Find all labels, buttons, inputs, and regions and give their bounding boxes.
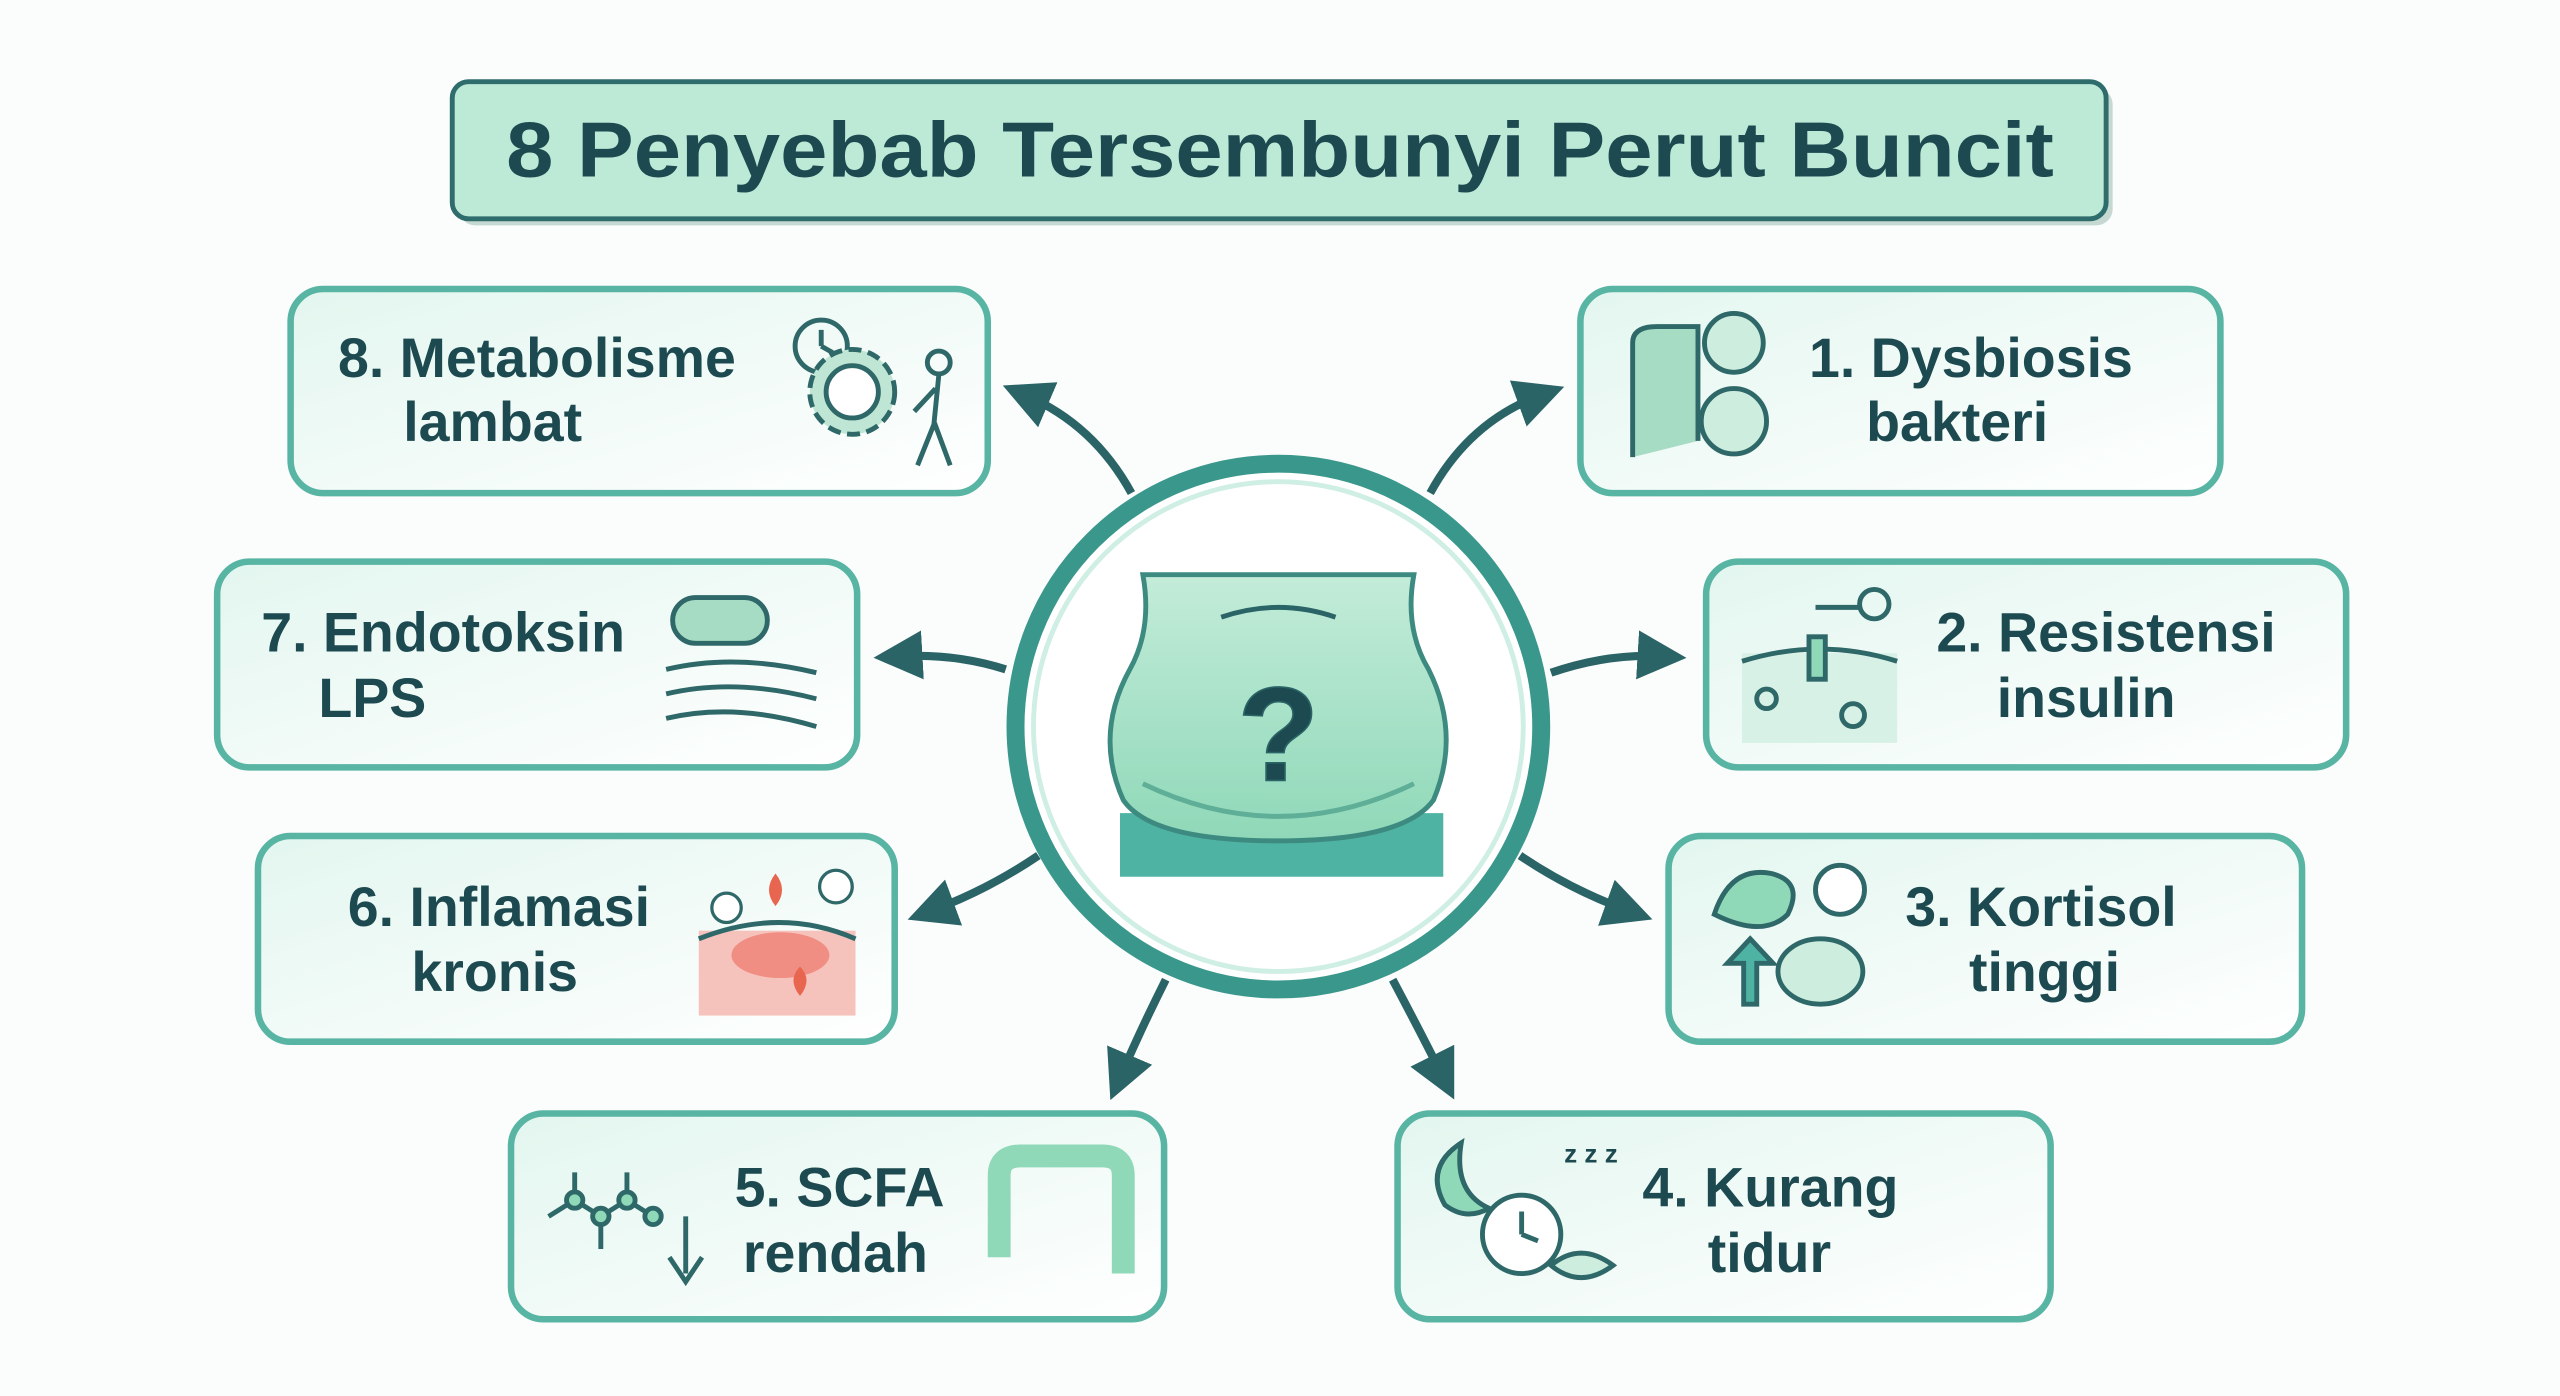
- icon: moon clock eye: [1437, 1139, 1618, 1278]
- panel: 8 metabolisme: 8. Metabolisme: [338, 327, 736, 389]
- panel: 7 endotoksin: 7. Endotoksin: [261, 601, 625, 663]
- panel: 2 resistensi: insulin: [1997, 667, 2176, 729]
- panel: 5 scfa: rendah: [743, 1222, 928, 1284]
- panel: 2 resistensi: 2. Resistensi: [1936, 601, 2276, 663]
- panel: 1 dysbiosis: 1. Dysbiosis: [1809, 327, 2133, 389]
- central circle with belly: ?: [1237, 660, 1319, 809]
- panel: 4 kurang tidur: [1398, 1114, 2051, 1319]
- icon: insulin receptor: [1742, 589, 1897, 743]
- title: 8 Penyebab Tersembunyi Perut Buncit: [506, 105, 2054, 193]
- panel: 4 kurang tidur: tidur: [1708, 1222, 1831, 1284]
- panel: 7 endotoksin: [217, 562, 857, 767]
- icon: bacterium and membrane: [666, 598, 816, 727]
- icon: molecule down arrow: [549, 1156, 1123, 1282]
- icon: adrenal brain clock: [1714, 865, 1864, 1004]
- panel: 7 endotoksin: LPS: [318, 667, 426, 729]
- panel: 6 inflamasi: kronis: [411, 941, 578, 1003]
- panel: 8 metabolisme: [291, 289, 988, 493]
- panel: 5 scfa: 5. SCFA: [735, 1157, 944, 1219]
- panel: 5 scfa: [511, 1114, 1164, 1319]
- icon: clock gear: [795, 320, 950, 465]
- panel: 3 kortisol: 3. Kortisol: [1905, 876, 2177, 938]
- panel: 6 inflamasi: 6. Inflamasi: [348, 876, 650, 938]
- panel: 1 dysbiosis: bakteri: [1866, 391, 2048, 453]
- panel: 8 metabolisme: lambat: [403, 391, 582, 453]
- panel: 4 kurang tidur: 4. Kurang: [1642, 1157, 1898, 1219]
- panel: 6 inflamasi: [258, 836, 895, 1042]
- title: [452, 82, 2113, 225]
- arrows: [898, 395, 1662, 1078]
- panel: 3 kortisol: [1669, 836, 2302, 1042]
- panel: 3 kortisol: tinggi: [1969, 941, 2120, 1003]
- icon: gut bacteria: [1633, 313, 1767, 457]
- central circle with belly: [1016, 464, 1541, 989]
- icon: colon: [999, 1156, 1123, 1274]
- icon: inflamed tissue: [699, 870, 856, 1016]
- panel: 2 resistensi: [1706, 562, 2346, 767]
- icon: moon clock eye: z z z: [1564, 1139, 1618, 1169]
- panel: 1 dysbiosis: [1580, 289, 2220, 493]
